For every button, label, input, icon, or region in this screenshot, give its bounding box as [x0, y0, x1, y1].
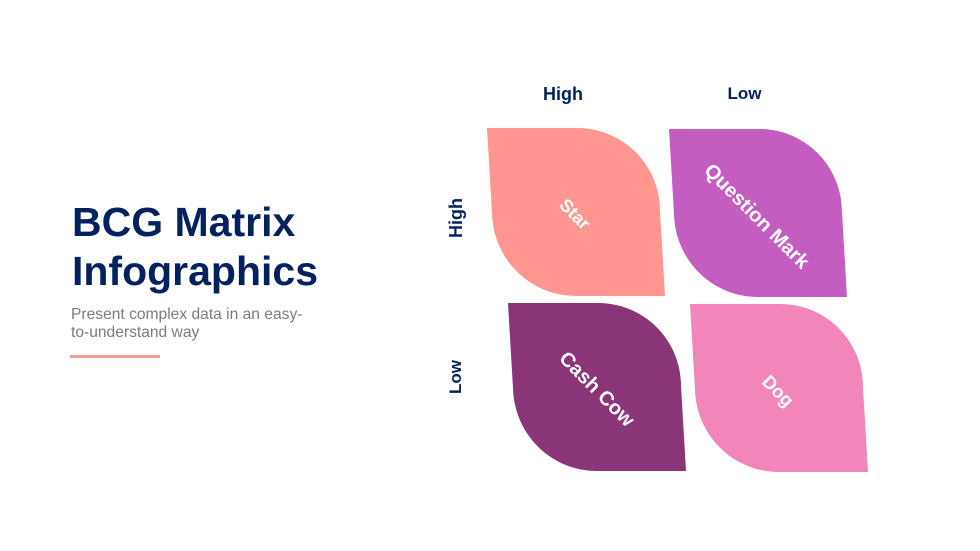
- column label: Low: Low: [728, 84, 762, 103]
- quadrant: Question Mark: Question Mark: [700, 160, 814, 274]
- accent line: [70, 355, 160, 358]
- subtitle: [71, 306, 302, 341]
- title: Infographics: [72, 248, 318, 294]
- quadrant: Dog: Dog: [758, 371, 798, 411]
- column label: High: High: [543, 84, 583, 104]
- subtitle: Present complex data in an easy-: [71, 306, 302, 323]
- quadrant: Dog: [690, 304, 868, 472]
- quadrant: Question Mark: [669, 129, 847, 297]
- row label: High: High: [446, 198, 466, 238]
- quadrant: Star: [487, 128, 665, 296]
- title: [72, 199, 318, 294]
- subtitle: to-understand way: [71, 324, 199, 341]
- quadrant: Star: Star: [555, 195, 594, 234]
- title: BCG Matrix: [72, 199, 295, 245]
- row label: Low: Low: [446, 359, 465, 394]
- quadrant: Cash Cow: Cash Cow: [555, 348, 639, 432]
- quadrant: Cash Cow: [508, 303, 686, 471]
